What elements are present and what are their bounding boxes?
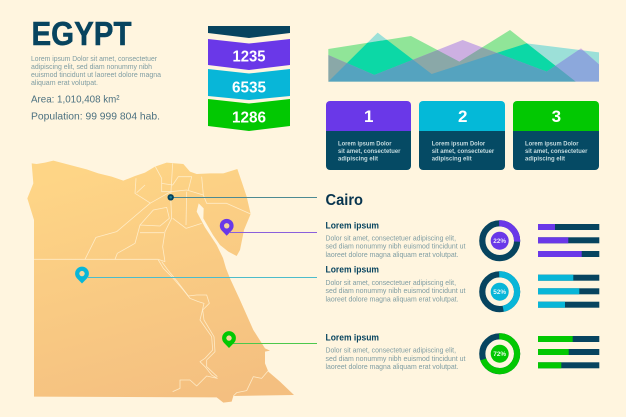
donut: 72%: 72% xyxy=(493,351,506,358)
heading: Cairo: Cairo xyxy=(326,192,363,209)
text block 3: Lorem ipsum xyxy=(326,333,379,344)
bars: cyan xyxy=(538,275,599,308)
text block 2 xyxy=(326,265,466,304)
chevron stack xyxy=(208,26,290,131)
card 1 xyxy=(326,101,411,170)
text block 1 xyxy=(326,220,466,259)
intro text: Lorem ipsum Dolor sit amet, consectetuer xyxy=(31,54,157,63)
bars: purple xyxy=(538,224,599,257)
text block 2: Dolor sit amet, consectetuer adipiscing elit, xyxy=(326,278,456,287)
donut: 52% xyxy=(482,274,517,309)
area chart xyxy=(328,30,599,82)
text block 1: Lorem ipsum xyxy=(326,220,379,231)
chevron: 1286: 1286 xyxy=(232,110,266,126)
card 3: sit amet, consectetuer xyxy=(525,148,588,155)
connector: green pin xyxy=(232,342,317,344)
text block 3: Dolor sit amet, consectetuer adipiscing elit, xyxy=(326,346,456,355)
population stat: Population: 99 999 804 hab. xyxy=(31,112,160,123)
donut: 22%: 22% xyxy=(493,238,506,245)
card 3: Lorem ipsum Dolor xyxy=(525,141,579,148)
area stat: Area: 1,010,408 km² xyxy=(31,94,120,105)
intro text: adipiscing elit, sed diam nonummy nibh xyxy=(31,62,152,71)
marker: Cairo xyxy=(168,194,174,200)
card 1: sit amet, consectetuer xyxy=(338,148,401,155)
card 1: 1 xyxy=(364,107,373,126)
card 2: sit amet, consectetuer xyxy=(432,148,495,155)
pin: purple xyxy=(220,219,234,236)
title: EGYPT xyxy=(32,15,132,52)
connector: Cairo xyxy=(172,196,317,198)
card 3: 3 xyxy=(552,107,561,126)
card 2: adipiscing elit xyxy=(432,156,472,162)
pin: cyan xyxy=(75,267,89,284)
donut: 52%: 52% xyxy=(493,289,506,296)
donut: 22% xyxy=(482,223,517,258)
connector: cyan pin xyxy=(88,276,317,278)
text block 3: sed diam nonummy nibh euismod tincidunt ut xyxy=(326,354,466,363)
text block 1: sed diam nonummy nibh euismod tincidunt ut xyxy=(326,242,466,251)
text block 2: sed diam nonummy nibh euismod tincidunt ut xyxy=(326,286,466,295)
text block 2: Lorem ipsum xyxy=(326,265,379,276)
connector: purple pin xyxy=(230,232,317,234)
card 2: Lorem ipsum Dolor xyxy=(432,141,486,148)
text block 3: laoreet dolore magna aliquam erat volutpat. xyxy=(326,362,458,371)
region borders xyxy=(34,163,268,396)
bars: green xyxy=(538,336,599,368)
pin: green xyxy=(222,331,236,348)
text block 1: laoreet dolore magna aliquam erat volutpat. xyxy=(326,250,458,259)
chevron: 6535: 6535 xyxy=(232,80,266,96)
text block 2: laoreet dolore magna aliquam erat volutpat. xyxy=(326,294,458,304)
card 2: 2 xyxy=(458,107,467,126)
card 1: adipiscing elit xyxy=(338,156,379,162)
text block 1: Dolor sit amet, consectetuer adipiscing elit, xyxy=(326,234,456,242)
card 1: Lorem ipsum Dolor xyxy=(338,141,392,148)
chevron: 1235: 1235 xyxy=(232,48,266,66)
intro text: euismod tincidunt ut laoreet dolore magna xyxy=(31,70,162,79)
intro text xyxy=(31,54,162,87)
card 2 xyxy=(419,101,505,170)
chevron: dark header xyxy=(208,26,290,38)
map of Egypt xyxy=(27,161,294,403)
text block 3 xyxy=(326,333,466,371)
donut: 72% xyxy=(482,336,517,371)
card 3: adipiscing elit xyxy=(525,156,566,162)
map outline xyxy=(27,161,294,403)
intro text: aliquam erat volutpat. xyxy=(31,78,98,87)
card 3 xyxy=(513,101,599,170)
